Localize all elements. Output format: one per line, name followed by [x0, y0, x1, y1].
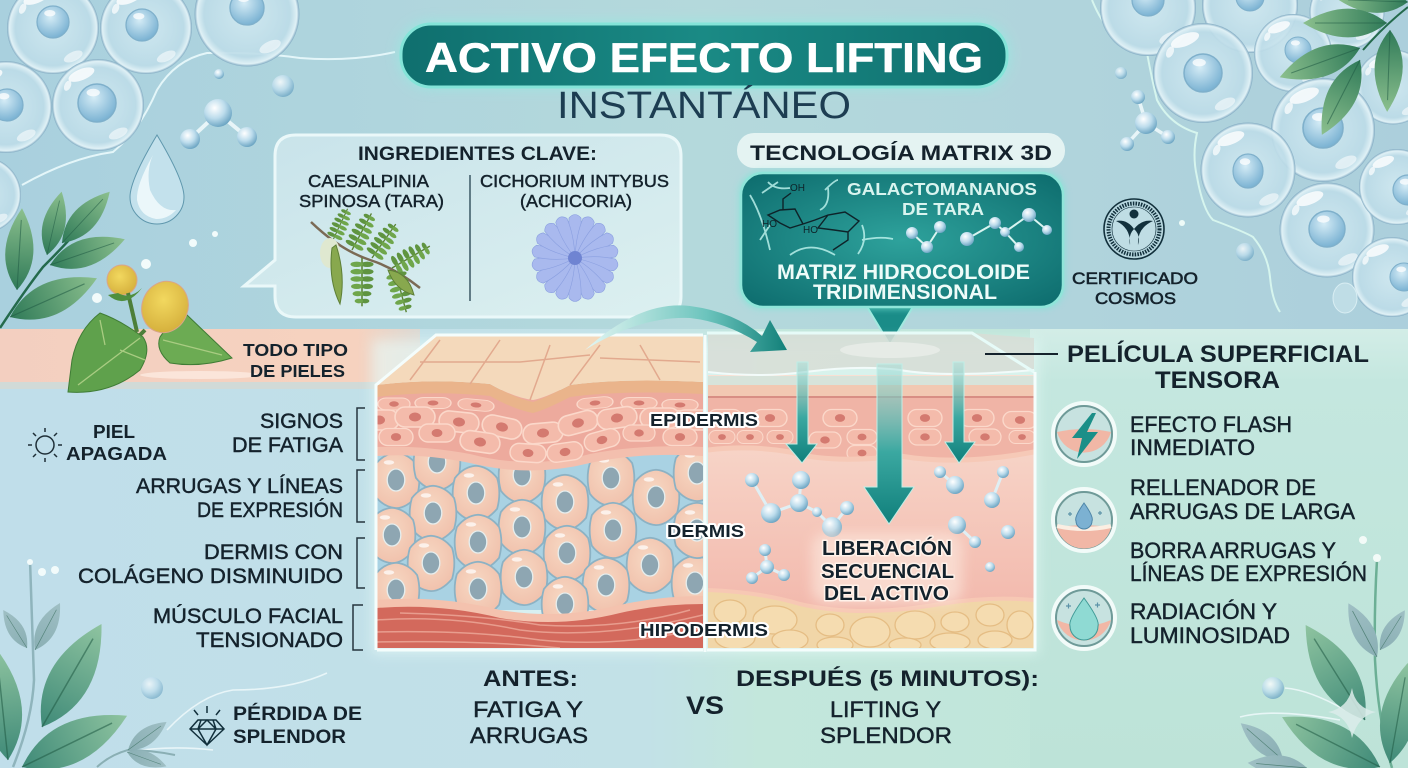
- label: liberacion secuencial: LIBERACIÓN: [822, 536, 952, 560]
- label: todo tipo de pieles: DE PIELES: [250, 361, 345, 381]
- title pill: [398, 21, 1010, 89]
- icon: chicory flower: [531, 214, 619, 302]
- icon: diamond: [190, 706, 224, 745]
- teal text 3: MATRIZ HIDROCOLOIDE: [777, 260, 1030, 284]
- icon: flash: [1053, 403, 1115, 465]
- benefits list: RADIACIÓN Y: [1130, 599, 1277, 624]
- certificate cosmos: [1072, 199, 1198, 308]
- molecule top-left: [92, 69, 294, 303]
- teal text: GALACTOMANANOS: [847, 179, 1037, 199]
- heading: pelicula superficial tensora: TENSORA: [1155, 367, 1280, 394]
- symptoms list: [78, 410, 343, 652]
- label: perdida de splendor: PÉRDIDA DE: [233, 703, 362, 725]
- plant with yellow fruit: [68, 265, 232, 392]
- label: liberacion secuencial: SECUENCIAL: [821, 561, 954, 583]
- icon: tara plant: [311, 205, 435, 315]
- symptoms list: DE FATIGA: [232, 434, 343, 457]
- label: perdida de splendor: [233, 703, 362, 748]
- pill heading: [737, 133, 1065, 168]
- subtitle: INSTANTÁNEO: [557, 84, 851, 127]
- label: liberacion secuencial: DEL ACTIVO: [824, 583, 949, 605]
- benefits list: ARRUGAS DE LARGA: [1130, 499, 1355, 524]
- ingredient name: tara line 2: SPINOSA (TARA): [299, 191, 444, 211]
- icon: wrinkle filler: [1053, 489, 1115, 551]
- symptoms list: MÚSCULO FACIAL: [153, 605, 343, 628]
- panel: tecnologia matrix 3D: [737, 133, 1066, 345]
- ingredient name: achicoria: CICHORIUM INTYBUS: [480, 171, 669, 191]
- label: piel apagada: [66, 422, 167, 464]
- benefits list: LÍNEAS DE EXPRESIÓN: [1130, 561, 1367, 586]
- certificate label: CERTIFICADO: [1072, 269, 1198, 288]
- icon: sun: [28, 428, 62, 462]
- antes label: FATIGA Y: [473, 697, 583, 722]
- cells top-right: [1100, 0, 1408, 317]
- heading: pelicula superficial tensora: [985, 340, 1369, 394]
- leaves bottom-left: [0, 559, 175, 768]
- despues label: LIFTING Y: [830, 697, 941, 722]
- heading: pelicula superficial tensora: PELÍCULA SUPERFICIAL: [1067, 340, 1369, 368]
- label: perdida de splendor: SPLENDOR: [233, 727, 346, 748]
- certificate label 2: COSMOS: [1095, 289, 1176, 308]
- antes label: ARRUGAS: [470, 723, 588, 748]
- benefits list: INMEDIATO: [1130, 435, 1255, 460]
- brackets: [353, 408, 365, 650]
- sugar molecule: OH: [790, 183, 805, 194]
- benefits list: RELLENADOR DE: [1130, 475, 1316, 500]
- arrow: sequential arrows: [786, 362, 975, 524]
- teal text 4: TRIDIMENSIONAL: [813, 280, 997, 304]
- sugar molecule: [762, 183, 859, 250]
- benefits list: BORRA ARRUGAS Y: [1130, 538, 1336, 563]
- benefits list: LUMINOSIDAD: [1130, 623, 1290, 648]
- pill heading: TECNOLOGÍA MATRIX 3D: [750, 140, 1052, 165]
- molecules right: [745, 466, 1015, 584]
- despues label: SPLENDOR: [820, 723, 952, 748]
- cells top-left: [0, 0, 300, 233]
- icon: water drop: [130, 135, 184, 224]
- arrow: curved transfer: [585, 305, 787, 352]
- symptoms list: TENSIONADO: [196, 629, 343, 652]
- antes label: [470, 666, 588, 748]
- despues label: [736, 666, 1039, 748]
- benefits list: EFECTO FLASH: [1130, 412, 1292, 437]
- panel: ingredientes clave: [244, 135, 681, 317]
- left: before skin: [378, 336, 703, 648]
- sugar molecule: HO: [762, 219, 777, 230]
- icon: radiance: [1053, 587, 1115, 649]
- symptoms list: DE EXPRESIÓN: [197, 499, 343, 522]
- matrix cracks: [750, 180, 893, 255]
- symptoms list: COLÁGENO DISMINUIDO: [78, 565, 343, 588]
- label: todo tipo de pieles: [243, 340, 348, 381]
- molecule top-right: [1120, 90, 1175, 151]
- film outline: [707, 333, 1034, 372]
- ingredient name: tara: CAESALPINIA: [308, 171, 429, 191]
- label: todo tipo de pieles: TODO TIPO: [243, 340, 348, 360]
- leaves top-right: [1275, 0, 1408, 141]
- label: liberacion secuencial: [812, 533, 962, 605]
- leaves bottom-right: [1234, 536, 1408, 768]
- symptoms list: SIGNOS: [260, 410, 343, 433]
- teal text 2: DE TARA: [902, 199, 984, 219]
- frame: [376, 335, 1035, 652]
- leaves mid-left: [0, 184, 129, 332]
- despues label: DESPUÉS (5 MINUTOS):: [736, 666, 1039, 691]
- layer label: epidermis: EPIDERMIS: [650, 410, 758, 430]
- antes label: ANTES:: [483, 666, 578, 691]
- molecules in panel: [906, 208, 1052, 253]
- benefits list: [1130, 412, 1367, 648]
- panel heading: INGREDIENTES CLAVE:: [358, 144, 597, 165]
- label: piel apagada: PIEL: [93, 422, 135, 442]
- title text: ACTIVO EFECTO LIFTING: [425, 34, 983, 81]
- symptoms list: DERMIS CON: [204, 541, 343, 564]
- layer label: dermis: DERMIS: [667, 521, 744, 541]
- right: after skin: [708, 333, 1037, 653]
- layer label: hipodermis: HIPODERMIS: [640, 620, 768, 640]
- ingredient name: achicoria line 2: (ACHICORIA): [520, 191, 632, 211]
- symptoms list: ARRUGAS Y LÍNEAS: [136, 475, 343, 498]
- label: piel apagada: APAGADA: [66, 444, 167, 464]
- vs: VS: [686, 692, 724, 720]
- skin diagram: [359, 305, 1038, 654]
- sugar molecule: HO: [803, 225, 818, 236]
